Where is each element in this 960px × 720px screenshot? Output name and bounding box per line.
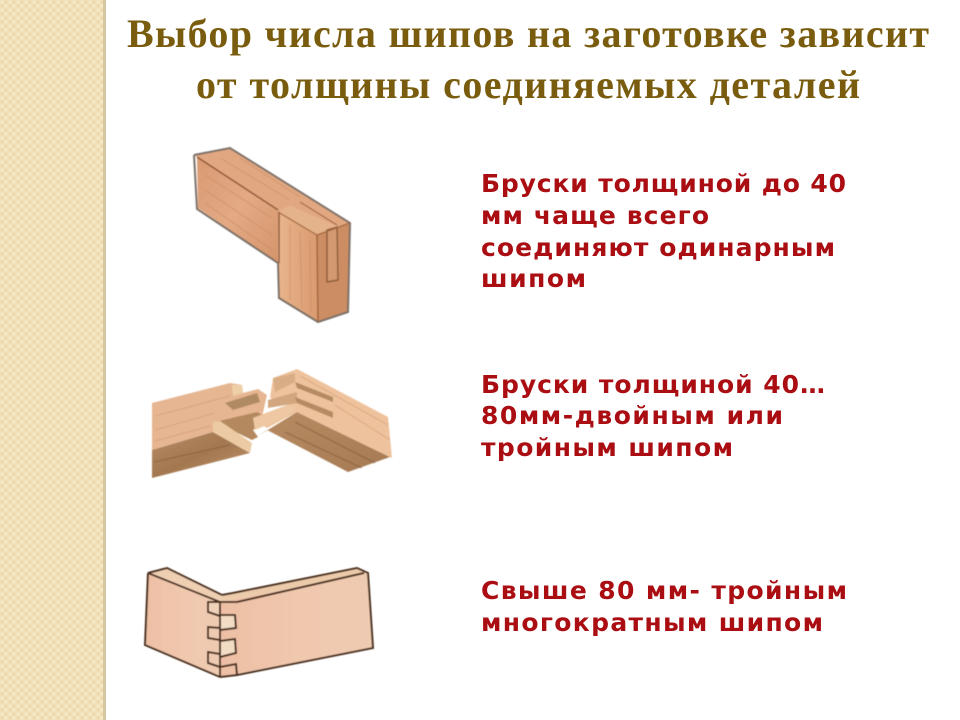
long side face [197, 157, 278, 263]
text block: multiple tenon: многократным шипом [481, 608, 823, 637]
left piece top [152, 383, 267, 450]
text block: single tenon [481, 169, 846, 293]
title: от толщины соединяемых деталей [196, 62, 860, 107]
slot [327, 227, 338, 282]
text block: double or triple tenon [481, 370, 825, 462]
text block: double or triple tenon: Бруски толщиной 40… [481, 370, 825, 399]
end post right face [317, 223, 350, 322]
title: Выбор числа шипов на заготовке зависит [127, 11, 929, 56]
illustration: multiple tenon joint [145, 568, 373, 677]
top face [194, 148, 350, 227]
dovetail fingers [208, 602, 220, 616]
text block: single tenon: шипом [481, 264, 586, 293]
left end-grain [213, 421, 252, 453]
outlines [145, 568, 373, 677]
text block: single tenon: мм чаще всего [481, 201, 709, 230]
decorative side band [0, 0, 106, 720]
title [127, 11, 929, 107]
left recess [215, 412, 268, 440]
text block: double or triple tenon: 80мм-двойным или [481, 401, 783, 430]
right face [220, 573, 373, 677]
right piece slots [295, 382, 333, 402]
left face [145, 573, 220, 677]
post top [278, 206, 337, 235]
outlines [194, 148, 350, 322]
left tenon slot [225, 393, 260, 410]
grain lines [155, 376, 390, 441]
wood grain [205, 158, 311, 312]
text block: single tenon: Бруски толщиной до 40 [481, 169, 846, 198]
text block: double or triple tenon: тройным шипом [481, 433, 733, 462]
right piece top [253, 369, 392, 458]
right piece front [258, 412, 390, 472]
finger fills [220, 615, 236, 630]
text block: multiple tenon [481, 576, 847, 637]
illustration: single tenon joint [194, 148, 350, 322]
left piece side [152, 432, 250, 478]
right piece end-grain fingers [273, 373, 295, 392]
text block: multiple tenon: Свыше 80 мм- тройным [481, 576, 847, 605]
top faces [148, 568, 222, 602]
text block: single tenon: соединяют одинарным [481, 233, 835, 262]
end post front face [278, 212, 318, 322]
illustration: double tenon joint [152, 369, 392, 478]
